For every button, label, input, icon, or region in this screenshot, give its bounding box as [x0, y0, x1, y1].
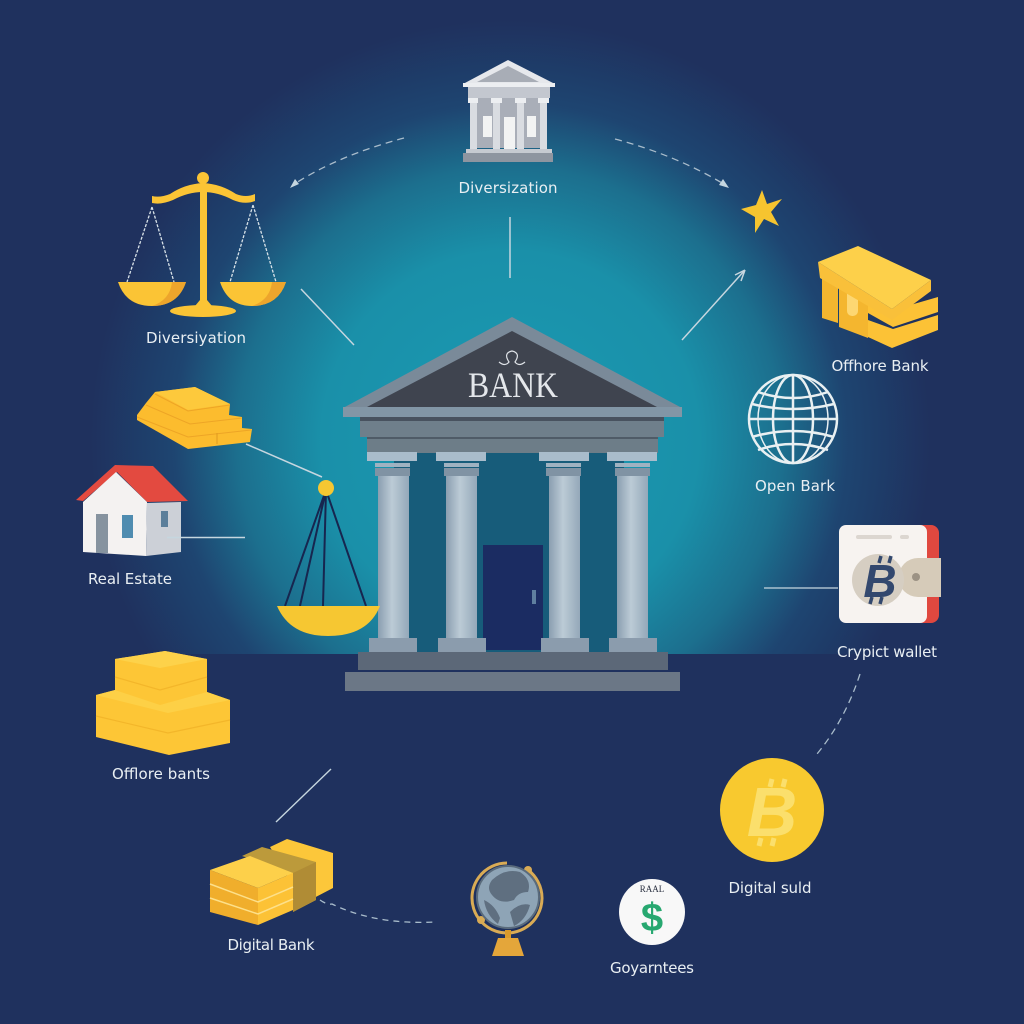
- label: wallet: Crypict wallet: [837, 643, 937, 661]
- connector: left diagonal: [301, 289, 354, 345]
- icon: desk globe: [472, 863, 542, 956]
- icon: gold stack, upper right: [818, 246, 938, 348]
- bank label: BANK: [468, 365, 558, 405]
- label: bitcoin coin: Digital suld: [728, 879, 812, 897]
- teal glow: [124, 54, 896, 654]
- arrow: top left dashed: [290, 138, 404, 188]
- icon: gold bars strapped: [210, 839, 333, 925]
- arrow: right diagonal: [682, 270, 745, 340]
- dashed connector: lower right: [817, 674, 860, 754]
- icon: house: [76, 465, 188, 556]
- arrow: top right dashed: [615, 139, 729, 188]
- connector: house: [167, 536, 245, 538]
- icon: balance scales: [118, 172, 286, 317]
- icon: bitcoin coin: [720, 758, 824, 862]
- dashed connector: digital bank: [320, 900, 436, 922]
- icon: wire globe: [749, 375, 837, 463]
- icon: hanging scale pan: [277, 480, 380, 636]
- icon: crypto wallet: B: [863, 555, 897, 607]
- label: digital bank: Digital Bank: [228, 936, 315, 954]
- label: top: Diversization: [458, 179, 558, 197]
- bank ornament: [499, 351, 525, 364]
- icon: gold stack, lower left: [96, 651, 230, 755]
- connector: top vertical: [509, 217, 511, 278]
- icon: dollar coin: RAAL: [640, 884, 664, 894]
- icon: bitcoin coin: B: [747, 773, 797, 851]
- label: coin: Goyarntees: [610, 959, 694, 977]
- label: lower left gold: Offlore bants: [112, 765, 210, 783]
- small bank icon: [463, 60, 555, 162]
- columns: [367, 452, 657, 652]
- icon: star: [741, 190, 782, 233]
- label: wire globe: Open Bark: [755, 477, 835, 495]
- label: house: Real Estate: [88, 570, 172, 588]
- central bank building: [343, 317, 682, 691]
- icon: dollar coin: $: [641, 896, 663, 940]
- icon: gold stack, upper left: [137, 387, 252, 449]
- connector: gold to scale: [246, 444, 322, 477]
- icon: crypto wallet: [839, 525, 941, 623]
- connector: lower left: [276, 769, 331, 822]
- connector: wallet: [764, 587, 838, 589]
- label: upper right gold: Offhore Bank: [832, 357, 929, 375]
- label: scales: Diversiyation: [146, 329, 246, 347]
- icon: dollar coin: [619, 879, 685, 945]
